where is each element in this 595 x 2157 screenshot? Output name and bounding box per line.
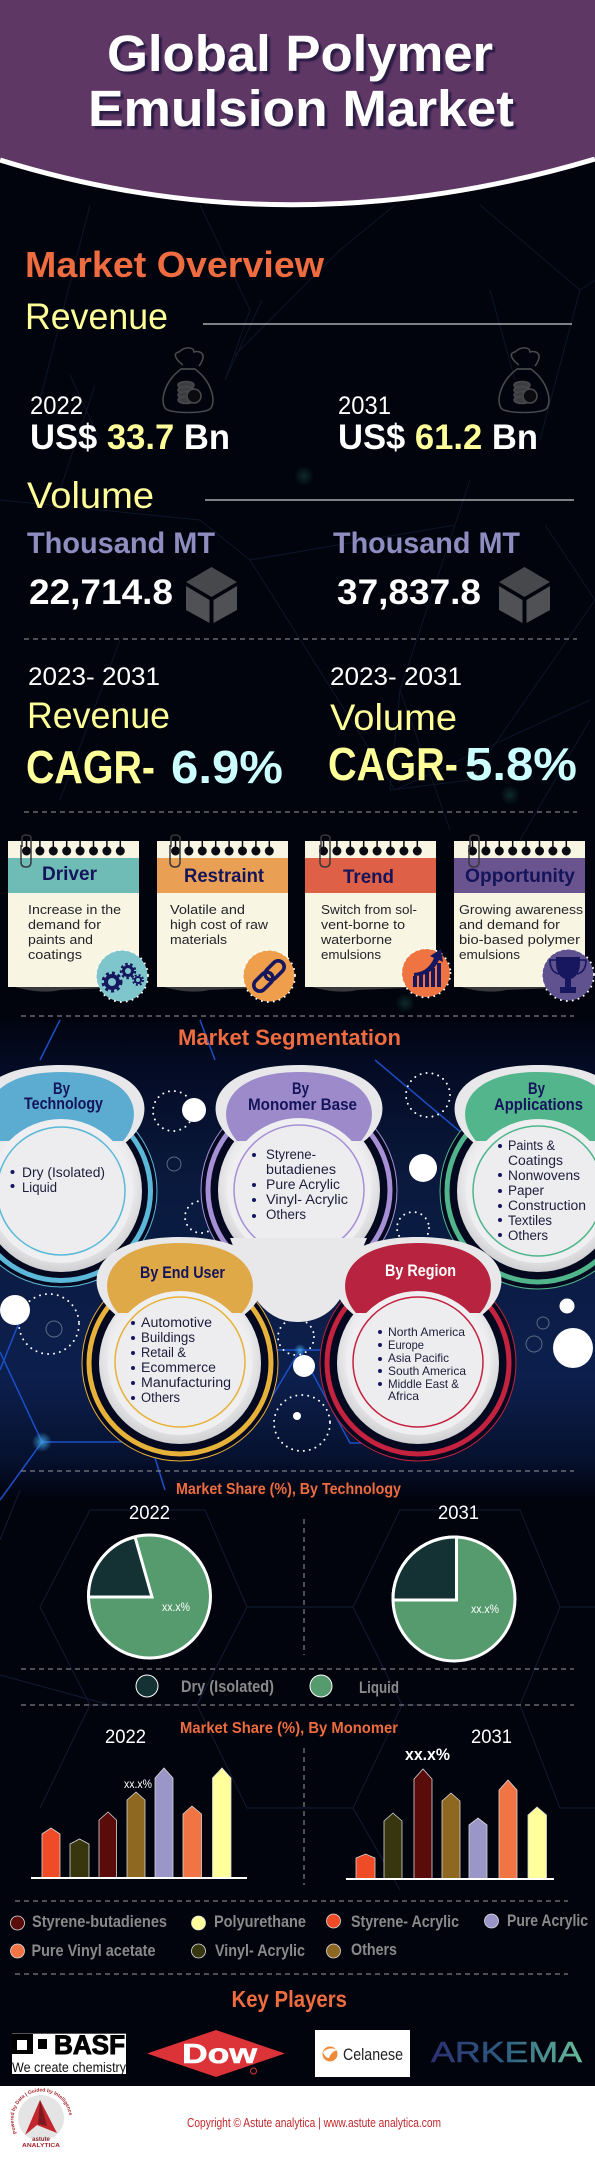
panel: by end user: Ecommerce [141, 1360, 216, 1375]
monomer legend: Polyurethane [214, 1912, 306, 1931]
monomer legend: Vinyl- Acrylic [215, 1941, 305, 1960]
panel: by end user: Retail & [141, 1345, 186, 1360]
icon: cube 2031 [499, 567, 550, 623]
decorative bubbles [0, 1073, 593, 1451]
revenue 2022 [30, 392, 230, 457]
pie chart 2022: xx.x% [162, 1602, 190, 1614]
panel: driver note: paints and [28, 932, 93, 947]
bar chart 2022 [31, 1727, 247, 1879]
panel: by monomer base: Pure Acrylic [266, 1177, 340, 1192]
icon: money bag 2031 [499, 348, 549, 412]
CAGR revenue: 6.9% [171, 741, 283, 793]
logo: Arkema: ARKEMA [431, 2037, 583, 2069]
panel: trend note [305, 835, 450, 998]
panel: by technology: By [53, 1080, 71, 1098]
CAGR volume: 5.8% [465, 738, 577, 790]
panel: by applications [440, 1065, 595, 1289]
bar chart 2022: xx.x% [124, 1779, 152, 1791]
panel: by end user: Manufacturing [141, 1375, 231, 1390]
panel: by region: Europe [388, 1338, 424, 1352]
panel: by applications: Nonwovens [508, 1168, 580, 1183]
header banner [0, 0, 595, 205]
revenue 2022: 2022 [30, 392, 83, 420]
segmentation background [0, 1018, 595, 1498]
panel: restraint note: high cost of raw [170, 917, 269, 932]
panel: by applications: Others [508, 1228, 548, 1243]
volume 2031: 37,837.8 [337, 573, 481, 612]
panel: by applications: Paints & [508, 1138, 555, 1153]
panel: by monomer base: Vinyl- Acrylic [266, 1192, 348, 1207]
title: Global Polymer [107, 25, 493, 82]
panel: restraint note: Restraint [184, 866, 265, 887]
revenue 2031: 2031 [338, 392, 391, 420]
panel: by monomer base: Monomer Base [248, 1096, 357, 1114]
panel: by applications: By [528, 1080, 546, 1098]
revenue 2031 [338, 392, 538, 457]
panel: by end user: By End User [140, 1263, 225, 1282]
CAGR volume: CAGR- [328, 738, 458, 790]
revenue 2022: US$ 33.7 Bn [30, 418, 230, 457]
monomer legend: Styrene- Acrylic [351, 1912, 459, 1931]
volume 2031: Thousand MT [333, 527, 520, 560]
panel: trend note: Trend [343, 867, 394, 888]
panel: by applications: Textiles [508, 1213, 552, 1228]
technology legend [136, 1675, 399, 1697]
panel: by region: South America [388, 1364, 466, 1378]
pie chart 2031 [393, 1503, 515, 1661]
CAGR revenue [26, 663, 283, 793]
panel: trend note: waterborne [320, 932, 392, 947]
panel: trend note: vent-borne to [321, 917, 405, 932]
bar chart 2022: 2022 [105, 1727, 146, 1748]
monomer legend: Styrene-butadienes [32, 1912, 167, 1931]
heading: market segmentation: Market Segmentation [178, 1025, 401, 1050]
footer logo: Astute Analytica: astute [32, 2137, 50, 2143]
icon: cube 2022 [186, 567, 237, 623]
segmentation network lines [0, 1020, 511, 1500]
panel: driver note: Driver [42, 864, 98, 885]
panel: by applications: Construction [508, 1198, 586, 1213]
panel: driver note: Increase in the [28, 902, 121, 917]
panel: opportunity note: emulsions [459, 947, 521, 962]
panel: opportunity note: and demand for [459, 917, 561, 932]
panel: by region: Asia Pacific [388, 1351, 449, 1365]
panel: by region: North America [388, 1325, 465, 1339]
CAGR volume [328, 663, 577, 790]
subheading: revenue: Revenue [25, 296, 168, 337]
panel: by end user: Buildings [141, 1330, 195, 1345]
panel: restraint note: materials [170, 932, 228, 947]
panel: driver note: coatings [28, 947, 83, 962]
footer logo: Astute Analytica: Powered by Data | Guided by Intelligence [10, 2088, 72, 2134]
monomer legend: Others [351, 1940, 397, 1959]
panel: opportunity note [454, 835, 594, 1001]
panel: by region [320, 1237, 516, 1461]
panel: trend note: emulsions [321, 947, 382, 962]
panel: by technology: Technology [24, 1095, 104, 1113]
CAGR volume: 2023- 2031 [330, 663, 462, 691]
revenue 2031: US$ 61.2 Bn [338, 418, 538, 457]
panel: restraint note [157, 835, 295, 1002]
background network lines [0, 205, 595, 1013]
CAGR revenue: 2023- 2031 [28, 663, 160, 691]
panel: opportunity note: Growing awareness [459, 902, 584, 917]
panel: by monomer base: Others [266, 1207, 306, 1222]
panel: trend note: Switch from sol- [321, 902, 417, 917]
panel: opportunity note: Opportunity [465, 866, 575, 887]
volume 2022 [27, 527, 215, 612]
panel: restraint note: Volatile and [170, 902, 245, 917]
panel: driver note [8, 835, 148, 1002]
technology legend: Liquid [359, 1678, 399, 1697]
panel: by technology [0, 1065, 157, 1287]
pie chart 2031: 2031 [438, 1503, 479, 1524]
pie chart 2022: 2022 [129, 1503, 170, 1524]
volume 2022: Thousand MT [27, 527, 215, 560]
panel: by applications: Coatings [508, 1153, 563, 1168]
panel: driver note: demand for [28, 917, 102, 932]
footer copyright: Copyright © Astute analytica | www.astute analytica.com [187, 2115, 441, 2130]
CAGR revenue: CAGR- [26, 741, 155, 793]
volume 2022: 22,714.8 [29, 573, 173, 612]
technology legend: Dry (Isolated) [181, 1677, 274, 1696]
heading: market overview: Market Overview [25, 244, 325, 285]
background hexagon lines [0, 1490, 595, 1890]
panel: by region: Middle East & [388, 1377, 459, 1391]
monomer legend: Pure Vinyl acetate [32, 1941, 156, 1960]
heading: market share by technology: Market Share (%), By Technology [176, 1481, 401, 1498]
monomer legend [10, 1911, 588, 1960]
logo: Dow: Dow [182, 2038, 257, 2069]
logo: BASF: BASF [54, 2030, 125, 2060]
pie chart 2022 [88, 1503, 210, 1658]
volume 2031 [333, 527, 520, 612]
panel: by end user [82, 1237, 278, 1461]
logo: Celanese [315, 2030, 410, 2077]
panel: by end user: Automotive [141, 1315, 212, 1330]
logo: Dow [147, 2030, 285, 2077]
panel: by technology: Liquid [22, 1180, 57, 1195]
panel: by technology: Dry (Isolated) [22, 1165, 105, 1180]
heading: market share by monomer: Market Share (%), By Monomer [180, 1720, 398, 1737]
subheading: volume: Volume [27, 475, 154, 516]
footer [0, 2086, 595, 2157]
logo: BASF [12, 2030, 126, 2075]
CAGR volume: Volume [330, 697, 457, 738]
icon: money bag 2022 [163, 348, 213, 412]
panel: by region: By Region [385, 1261, 456, 1280]
panel: by applications: Paper [508, 1183, 544, 1198]
logo: BASF: We create chemistry [12, 2059, 126, 2075]
bar chart 2031: xx.x% [405, 1745, 450, 1764]
panel: by applications: Applications [494, 1096, 583, 1114]
pie chart 2031: xx.x% [471, 1604, 499, 1616]
panel: by region: Africa [388, 1389, 419, 1403]
bar chart 2031 [346, 1727, 554, 1880]
center connector [230, 1238, 367, 1322]
panel: by monomer base [201, 1065, 397, 1288]
CAGR revenue: Revenue [27, 695, 170, 736]
title: Emulsion Market [88, 80, 514, 137]
heading: key players: Key Players [232, 1986, 347, 2012]
panel: by monomer base: By [292, 1080, 310, 1098]
bar chart 2031: 2031 [471, 1727, 512, 1748]
logo: Celanese: Celanese [343, 2045, 403, 2064]
panel: opportunity note: bio-based polymer [459, 932, 581, 947]
panel: by monomer base: butadienes [266, 1162, 336, 1177]
panel: by end user: Others [141, 1390, 180, 1405]
footer logo: Astute Analytica: ANALYTICA [22, 2143, 60, 2149]
panel: by monomer base: Styrene- [266, 1147, 316, 1162]
title [88, 25, 514, 137]
